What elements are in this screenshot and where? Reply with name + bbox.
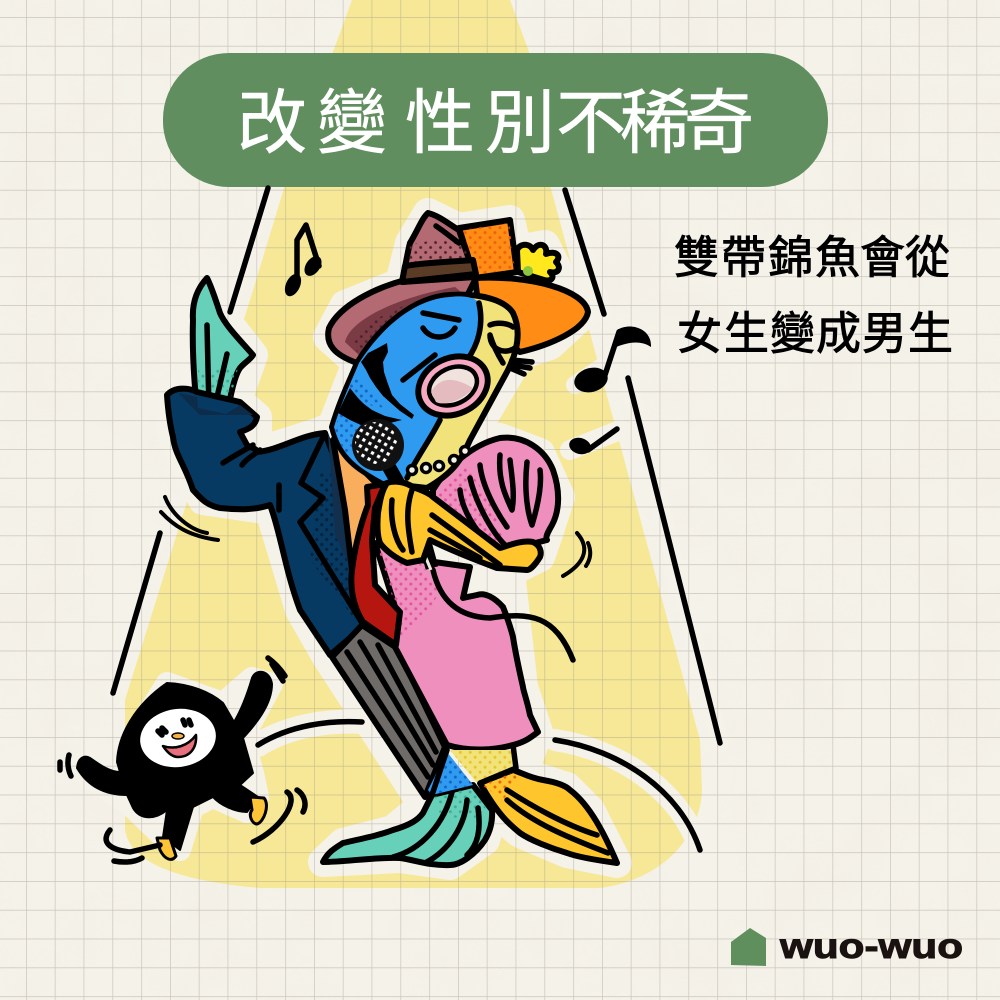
subtitle text: 女生變成男生 [677, 308, 953, 359]
spotlight beam [125, 0, 702, 888]
hat brim left [328, 276, 477, 363]
title banner [163, 53, 828, 187]
music note right small [567, 429, 617, 457]
flower [517, 245, 559, 281]
tail fin left teal [323, 752, 492, 865]
brow and closed eye [423, 313, 459, 320]
title text: 改變性別不稀奇 [237, 84, 754, 162]
logo wordmark: wuo-wuo [779, 927, 963, 966]
right eye and lashes [490, 323, 532, 374]
fish hat [328, 213, 588, 363]
raised sleeve [167, 389, 365, 655]
tail fin right orange [432, 745, 617, 863]
dress [375, 543, 573, 750]
music note left [282, 225, 325, 299]
mascot feet [157, 797, 266, 859]
trousers [332, 625, 445, 797]
mascot body [77, 672, 272, 850]
yellow arm [377, 482, 541, 570]
music note right large [571, 327, 651, 396]
red tie [351, 484, 400, 645]
fish head [332, 295, 532, 488]
mascot motion marks [60, 658, 305, 862]
logo house icon [731, 928, 766, 966]
spotlight rays and motion lines [113, 188, 720, 850]
pearl necklace [408, 446, 470, 474]
hat band [402, 260, 476, 282]
mascot face [136, 704, 220, 772]
logo [731, 927, 963, 966]
crown left [402, 213, 475, 282]
subtitle text: 雙帶錦魚會從 [674, 232, 950, 283]
black stripes [338, 343, 414, 426]
hat brim right [475, 278, 588, 352]
subtitle text [674, 232, 953, 359]
shirt collar [333, 440, 378, 570]
singing mouth [409, 345, 497, 427]
pink shell fin [433, 438, 558, 552]
microphone [352, 419, 432, 570]
cut-out halo around the characters [77, 188, 720, 865]
fish character [167, 213, 617, 865]
fin hand [193, 278, 253, 418]
crown right [459, 220, 517, 278]
dancing mascot [60, 658, 305, 862]
